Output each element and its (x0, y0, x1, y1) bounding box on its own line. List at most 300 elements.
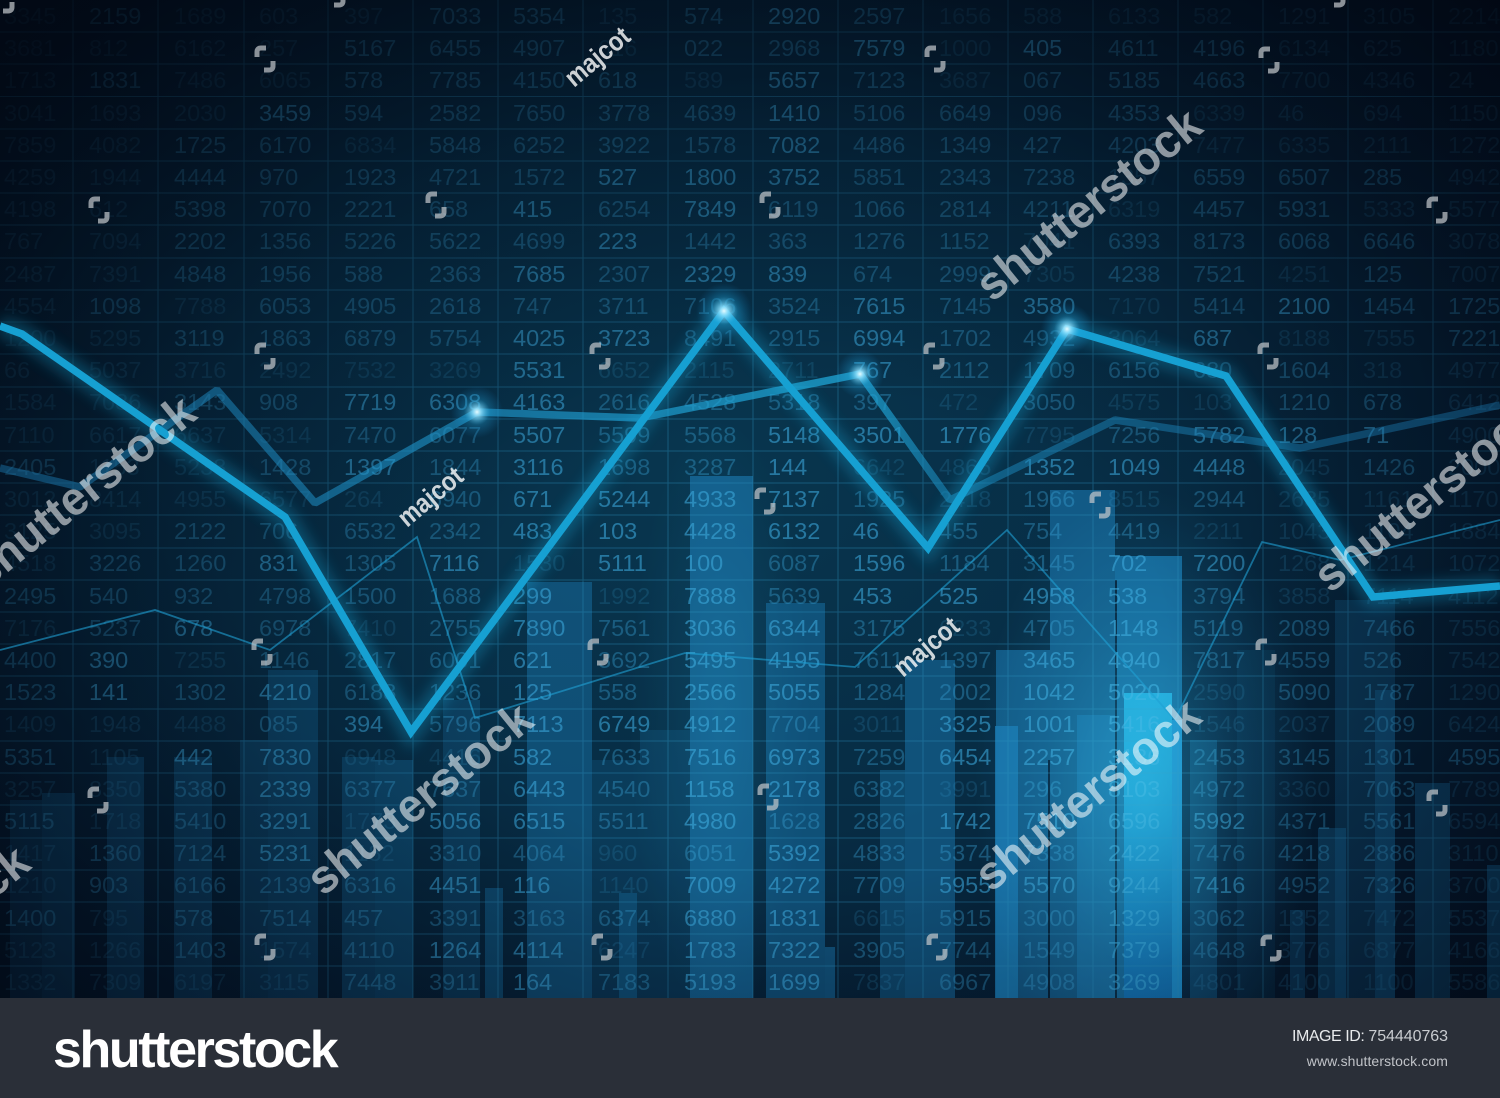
number table: 6166 (174, 872, 226, 898)
number table: 2817 (344, 647, 396, 673)
number table: 4451 (429, 872, 481, 898)
number table: 7788 (174, 293, 226, 319)
number table: 538 (1108, 583, 1147, 609)
number table: 1146 (259, 647, 310, 673)
number table: 903 (89, 872, 128, 898)
number table: 394 (344, 711, 383, 737)
number table: 7510 (1023, 808, 1075, 834)
number table: 588 (1023, 3, 1062, 29)
number table: 7542 (1448, 647, 1500, 673)
number table: 1546 (1193, 711, 1245, 737)
glow points (451, 283, 1093, 438)
number table: 2635 (1278, 486, 1330, 512)
number table: 1180 (1448, 35, 1499, 61)
number table: 1523 (4, 679, 56, 705)
number table: 3778 (598, 100, 650, 126)
number table: 7611 (853, 647, 904, 673)
number table: 1276 (853, 228, 905, 254)
number table: 4540 (598, 776, 650, 802)
number table: 6507 (1278, 164, 1330, 190)
number table: 1709 (1023, 357, 1075, 383)
number table: 4488 (174, 711, 226, 737)
number table: 1584 (4, 389, 56, 415)
number table: 397 (344, 3, 383, 29)
number table: 2944 (1193, 486, 1245, 512)
number table: 3310 (429, 840, 481, 866)
number table: 1596 (853, 550, 905, 576)
number table: 812 (89, 35, 128, 61)
number table: 6377 (344, 776, 396, 802)
number table: 6133 (1108, 3, 1160, 29)
number table: 4218 (1278, 840, 1330, 866)
number table: 7477 (1193, 132, 1245, 158)
number table: 3062 (1193, 905, 1245, 931)
number table: 7890 (513, 615, 565, 641)
number table: 415 (513, 196, 552, 222)
number table: 7326 (1363, 872, 1415, 898)
number table: 6344 (768, 615, 820, 641)
number table: 125 (513, 679, 552, 705)
number table: 1161 (1363, 486, 1414, 512)
number table: 6596 (1108, 808, 1160, 834)
number table: 2257 (1023, 744, 1075, 770)
number table: 6393 (1108, 228, 1160, 254)
number table: 318 (1363, 357, 1402, 383)
number table: 7633 (598, 744, 650, 770)
number table: 7379 (1108, 937, 1160, 963)
number table: 1260 (174, 550, 226, 576)
number table: 1698 (598, 454, 650, 480)
number table: 5231 (259, 840, 311, 866)
number table: 1357 (1108, 164, 1160, 190)
number table: 3110 (1448, 840, 1499, 866)
number table: 7650 (513, 100, 565, 126)
number table: 2115 (684, 357, 735, 383)
image id: IMAGE ID: 754440763 (1292, 1028, 1448, 1045)
number table: 7849 (684, 196, 736, 222)
number table: 1549 (1023, 937, 1075, 963)
number table: 7470 (344, 422, 396, 448)
number table: 4554 (4, 293, 56, 319)
number table: 4211 (1023, 196, 1074, 222)
main line series (0, 311, 1500, 732)
number table: 472 (939, 389, 978, 415)
number table: 3858 (1278, 583, 1330, 609)
number table: 285 (1363, 164, 1402, 190)
number table: 558 (598, 679, 637, 705)
number table: 5295 (89, 325, 141, 351)
number table: 5511 (598, 808, 649, 834)
number table: 6532 (344, 518, 396, 544)
number table: 4419 (1108, 518, 1160, 544)
number table: 7817 (1193, 647, 1245, 673)
number table: 405 (1023, 35, 1062, 61)
number table: 3391 (429, 905, 481, 931)
number table: 7486 (174, 67, 226, 93)
number table: 100 (684, 550, 723, 576)
number table: 1210 (1278, 389, 1330, 415)
number table: 2422 (1108, 840, 1160, 866)
number table: 3145 (1278, 744, 1330, 770)
majcot watermarks: majcot (888, 611, 965, 683)
number table: 612 (89, 196, 128, 222)
number table: 671 (513, 486, 552, 512)
number table: 6319 (1108, 196, 1160, 222)
number table: 1800 (684, 164, 736, 190)
number table: 7082 (768, 132, 820, 158)
number table: 2329 (684, 261, 736, 287)
number table: 6948 (344, 744, 396, 770)
number table: 5568 (684, 422, 736, 448)
number table: 5622 (429, 228, 481, 254)
number table: 6156 (1108, 357, 1160, 383)
number table: 103 (598, 518, 637, 544)
number table: 3752 (768, 164, 820, 190)
number table: 4203 (1108, 132, 1160, 158)
number table: 7200 (1193, 550, 1245, 576)
number table: 4900 (1448, 422, 1500, 448)
number table: 1530 (513, 550, 565, 576)
number table: 2886 (1363, 840, 1415, 866)
number table: 4952 (1278, 872, 1330, 898)
number table: 1783 (684, 937, 736, 963)
number table: 7837 (853, 969, 905, 995)
number table: 1966 (1023, 486, 1075, 512)
number table: 1153 (89, 454, 140, 480)
number table: 7514 (259, 905, 311, 931)
number table: 7116 (429, 550, 480, 576)
number table: 2339 (259, 776, 311, 802)
number table: 2616 (598, 389, 650, 415)
number table: 1356 (259, 228, 311, 254)
number table: 457 (344, 905, 383, 931)
number table: 5148 (768, 422, 820, 448)
number table: 4699 (513, 228, 565, 254)
number table: 9244 (1108, 872, 1160, 898)
number table: 3011 (853, 711, 904, 737)
number table: 7338 (1023, 840, 1075, 866)
number table: 1072 (1448, 550, 1500, 576)
number table: 7637 (429, 776, 481, 802)
number table: 6053 (259, 293, 311, 319)
number table: 6077 (429, 422, 481, 448)
number table: 4444 (174, 164, 226, 190)
number table: 1182 (344, 840, 395, 866)
number table: 1214 (1363, 550, 1415, 576)
number table: 5537 (1448, 905, 1500, 931)
number table: 3041 (4, 100, 56, 126)
number table: 2582 (429, 100, 481, 126)
number table: 5851 (853, 164, 905, 190)
number table: 4905 (344, 293, 396, 319)
number table: 2920 (768, 3, 820, 29)
number table: 7448 (344, 969, 396, 995)
number table: 3905 (853, 937, 905, 963)
number table: 1831 (768, 905, 820, 931)
majcot watermarks: majcot (559, 21, 636, 93)
number table: 932 (174, 583, 213, 609)
number table: 5992 (1193, 808, 1245, 834)
number table: 4064 (513, 840, 565, 866)
number table: 526 (1363, 647, 1402, 673)
number table: 6967 (939, 969, 991, 995)
number table: 6316 (344, 872, 396, 898)
number table: 7123 (853, 67, 905, 93)
number table: 1454 (1363, 293, 1415, 319)
number table: 363 (768, 228, 807, 254)
number table: 3291 (259, 808, 311, 834)
number table: 3287 (684, 454, 736, 480)
number table: 022 (684, 35, 723, 61)
number table: 1291 (1278, 3, 1330, 29)
number table: 1578 (684, 132, 736, 158)
number table: 7830 (259, 744, 311, 770)
number table: 1100 (1363, 969, 1414, 995)
number table: 3681 (4, 35, 56, 61)
number table: 6879 (344, 325, 396, 351)
number table: 589 (684, 67, 723, 93)
number table: 6455 (429, 35, 481, 61)
number table: 1210 (4, 872, 56, 898)
footer logo: shutterstock (53, 1021, 336, 1079)
number table: 1844 (429, 454, 481, 480)
number table: 6252 (513, 132, 565, 158)
number table: 5167 (344, 35, 396, 61)
number table: 2111 (1363, 132, 1412, 158)
number table: 6001 (429, 647, 481, 673)
number table: 4908 (1023, 969, 1075, 995)
number table: 5111 (598, 550, 647, 576)
number table: 1500 (344, 583, 396, 609)
number table: 2002 (939, 679, 991, 705)
number table: 3459 (259, 100, 311, 126)
number table: 4400 (4, 647, 56, 673)
number table: 6247 (598, 937, 650, 963)
number table: 4110 (344, 937, 395, 963)
number table: 4353 (1108, 100, 1160, 126)
number table: 7113 (513, 711, 564, 737)
number table: 1290 (1448, 679, 1500, 705)
number table: 7888 (684, 583, 736, 609)
number table: 7700 (1278, 67, 1330, 93)
number table: 4942 (1448, 164, 1500, 190)
number table: 5106 (853, 100, 905, 126)
number table: 1773 (344, 808, 396, 834)
number table: 1410 (768, 100, 820, 126)
number table: 4100 (1278, 969, 1330, 995)
number table: 3095 (89, 518, 141, 544)
number table: 1702 (939, 325, 991, 351)
number table: 618 (598, 67, 637, 93)
number table: 5380 (174, 776, 226, 802)
number table: 578 (344, 67, 383, 93)
number table: 680 (1193, 357, 1232, 383)
number table: 1184 (939, 550, 990, 576)
number table: 4705 (1023, 615, 1075, 641)
number table: 1272 (1448, 132, 1500, 158)
number table: 582 (513, 744, 552, 770)
number table: 1688 (429, 583, 481, 609)
number table: 4865 (939, 454, 991, 480)
majcot watermarks: majcot (392, 461, 469, 533)
number table: 3175 (853, 615, 905, 641)
number table: 7256 (1108, 422, 1160, 448)
number table: 2405 (4, 454, 56, 480)
number table: 1725 (1448, 293, 1500, 319)
number table: 767 (4, 228, 43, 254)
number table: 390 (89, 647, 128, 673)
number table: 3692 (598, 647, 650, 673)
number table: 2089 (1363, 711, 1415, 737)
number table: 2202 (174, 228, 226, 254)
number table: 527 (598, 164, 637, 190)
number table: 8414 (89, 486, 141, 512)
number table: 4259 (4, 164, 56, 190)
number table: 5226 (344, 228, 396, 254)
number table: 2711 (768, 357, 819, 383)
number table: 1656 (939, 3, 991, 29)
number table: 6197 (174, 969, 226, 995)
number table: 3524 (768, 293, 820, 319)
number table: 7556 (1448, 615, 1500, 641)
number table: 2363 (429, 261, 481, 287)
number table: 2178 (768, 776, 820, 802)
number table: 5237 (89, 615, 141, 641)
number table: 3465 (1023, 647, 1075, 673)
number table: 7255 (174, 647, 226, 673)
number table: 603 (259, 3, 298, 29)
number table: 5185 (1108, 67, 1160, 93)
number table: 397 (853, 389, 892, 415)
number table: 7561 (598, 615, 650, 641)
number table: 4346 (1363, 67, 1415, 93)
number table: 4166 (1448, 937, 1500, 963)
number table: 4416 (429, 744, 481, 770)
number table: 4428 (684, 518, 736, 544)
number table: 5193 (684, 969, 736, 995)
number table: 960 (598, 840, 637, 866)
number table: 6382 (853, 776, 905, 802)
number table: 427 (1023, 132, 1062, 158)
number table: 6443 (513, 776, 565, 802)
number table: 3580 (1023, 293, 1075, 319)
number table: 6515 (513, 808, 565, 834)
number table: 7516 (684, 744, 736, 770)
number table: 5410 (174, 808, 226, 834)
number table: 6978 (259, 615, 311, 641)
number table: 7615 (853, 293, 905, 319)
number table: 6646 (1363, 228, 1415, 254)
number table: 7063 (1363, 776, 1415, 802)
number table: 2000 (1448, 454, 1500, 480)
number table: 6649 (939, 100, 991, 126)
number table: 4195 (768, 647, 820, 673)
number table: 5796 (429, 711, 481, 737)
number table: 4955 (174, 486, 226, 512)
number table: 706 (259, 518, 298, 544)
number table: 7416 (1193, 872, 1245, 898)
number table: 4977 (1448, 357, 1500, 383)
number table: 5639 (768, 583, 820, 609)
number table: 6973 (768, 744, 820, 770)
number table: 4371 (1278, 808, 1330, 834)
number table: 621 (513, 647, 552, 673)
number table: 1409 (4, 711, 56, 737)
number table: 2343 (939, 164, 991, 190)
number table: 6233 (939, 615, 991, 641)
number table: 4980 (684, 808, 736, 834)
number table: 4958 (1023, 583, 1075, 609)
number table: 4721 (429, 164, 481, 190)
number table: 4912 (684, 711, 736, 737)
number table: 7009 (684, 872, 736, 898)
number table: 1442 (684, 228, 736, 254)
number table: 2214 (1448, 3, 1500, 29)
number table: 6162 (174, 35, 226, 61)
number table: 085 (259, 711, 298, 737)
number table: 1713 (4, 67, 56, 93)
number table: 4972 (1193, 776, 1245, 802)
number table: 4801 (1193, 969, 1245, 995)
number table: 1718 (89, 808, 141, 834)
number table: 1574 (259, 937, 311, 963)
number table: 7322 (768, 937, 820, 963)
number table: 7472 (1363, 905, 1415, 931)
number table: 5531 (513, 357, 565, 383)
number table: 702 (1108, 550, 1147, 576)
medium line series (0, 374, 1500, 503)
number table: 1689 (174, 3, 226, 29)
number table: 767 (853, 357, 892, 383)
number table: 625 (1363, 35, 1402, 61)
number table: 5123 (4, 937, 56, 963)
number table: 5570 (1023, 872, 1075, 898)
number table: 4940 (1108, 647, 1160, 673)
number table: 257 (259, 35, 298, 61)
number table: 4210 (259, 679, 311, 705)
number table: 1923 (344, 164, 396, 190)
number table: 678 (1363, 389, 1402, 415)
number table: 2112 (939, 357, 990, 383)
number table: 3776 (1278, 937, 1330, 963)
website url: www.shutterstock.com (1307, 1053, 1448, 1069)
number table: 7145 (939, 293, 991, 319)
number table: 3115 (259, 969, 310, 995)
number table: 7859 (4, 132, 56, 158)
number table: 5056 (429, 808, 481, 834)
number table: 795 (89, 905, 128, 931)
number table: 3360 (1278, 776, 1330, 802)
number table: 299 (513, 583, 552, 609)
number table: 4528 (684, 389, 736, 415)
number table: 7466 (1363, 615, 1415, 641)
number table: 674 (853, 261, 892, 287)
number table: 1329 (1108, 905, 1160, 931)
number table: 7521 (1193, 261, 1245, 287)
number table: 4663 (1193, 67, 1245, 93)
number table: 582 (1193, 3, 1232, 29)
number table: 3050 (1023, 389, 1075, 415)
number table: 46 (1278, 100, 1304, 126)
number table: 3163 (513, 905, 565, 931)
number table: 2487 (4, 261, 56, 287)
number table: 5931 (1278, 196, 1330, 222)
number table: 5055 (768, 679, 820, 705)
number table: 4833 (853, 840, 905, 866)
number table: 4486 (853, 132, 905, 158)
number table: 1104 (1363, 518, 1414, 544)
number table: 1400 (4, 905, 56, 931)
